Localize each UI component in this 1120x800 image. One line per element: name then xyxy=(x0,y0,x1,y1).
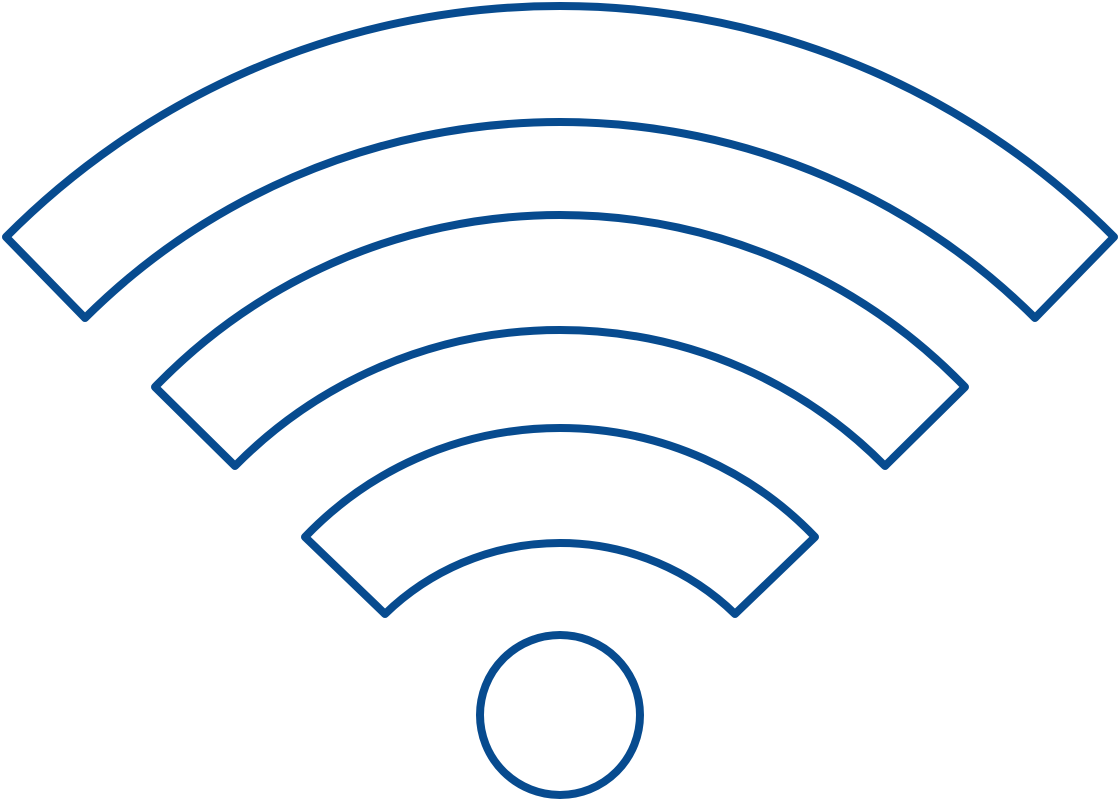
dot: circle xyxy=(480,635,640,795)
arc band: middle xyxy=(155,215,965,466)
arc band: outer xyxy=(6,6,1114,318)
arc band: inner xyxy=(305,428,815,614)
